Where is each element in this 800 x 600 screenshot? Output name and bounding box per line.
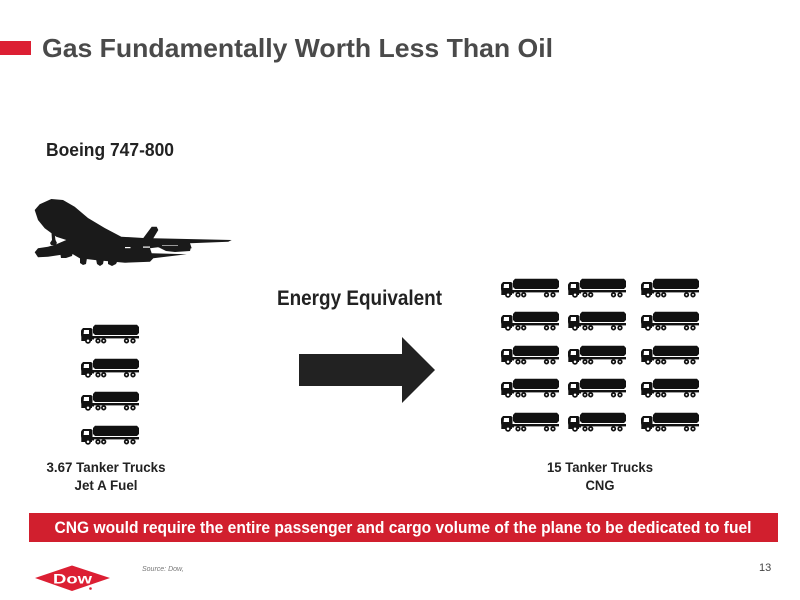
callout banner xyxy=(29,513,778,542)
icon: airplane silhouette xyxy=(35,199,232,266)
page number: 13 xyxy=(759,562,771,574)
caption: jet fuel trucks xyxy=(46,459,166,493)
logo: Dow diamond xyxy=(35,566,110,591)
arrow xyxy=(299,337,435,403)
caption: CNG trucks xyxy=(547,459,653,493)
logo: Dow diamond: Dow xyxy=(53,570,92,586)
caption: CNG trucks: 15 Tanker Trucks xyxy=(547,459,653,475)
title accent bar xyxy=(0,41,31,55)
caption: jet fuel trucks: 3.67 Tanker Trucks xyxy=(46,459,166,475)
icon group: 15 tanker trucks xyxy=(501,279,699,431)
caption: jet fuel trucks: Jet A Fuel xyxy=(74,477,138,493)
icon group: 3.67 tanker trucks xyxy=(81,325,139,444)
caption: CNG trucks: CNG xyxy=(586,477,615,493)
label: Energy Equivalent: Energy Equivalent xyxy=(277,287,442,310)
source note: Source: Dow, xyxy=(142,566,184,573)
title: Gas Fundamentally Worth Less Than Oil xyxy=(42,33,553,63)
heading: Boeing 747-800: Boeing 747-800 xyxy=(46,140,174,160)
callout banner: CNG would require the entire passenger and cargo volume of the plane to be dedicated to fuel xyxy=(54,518,752,537)
